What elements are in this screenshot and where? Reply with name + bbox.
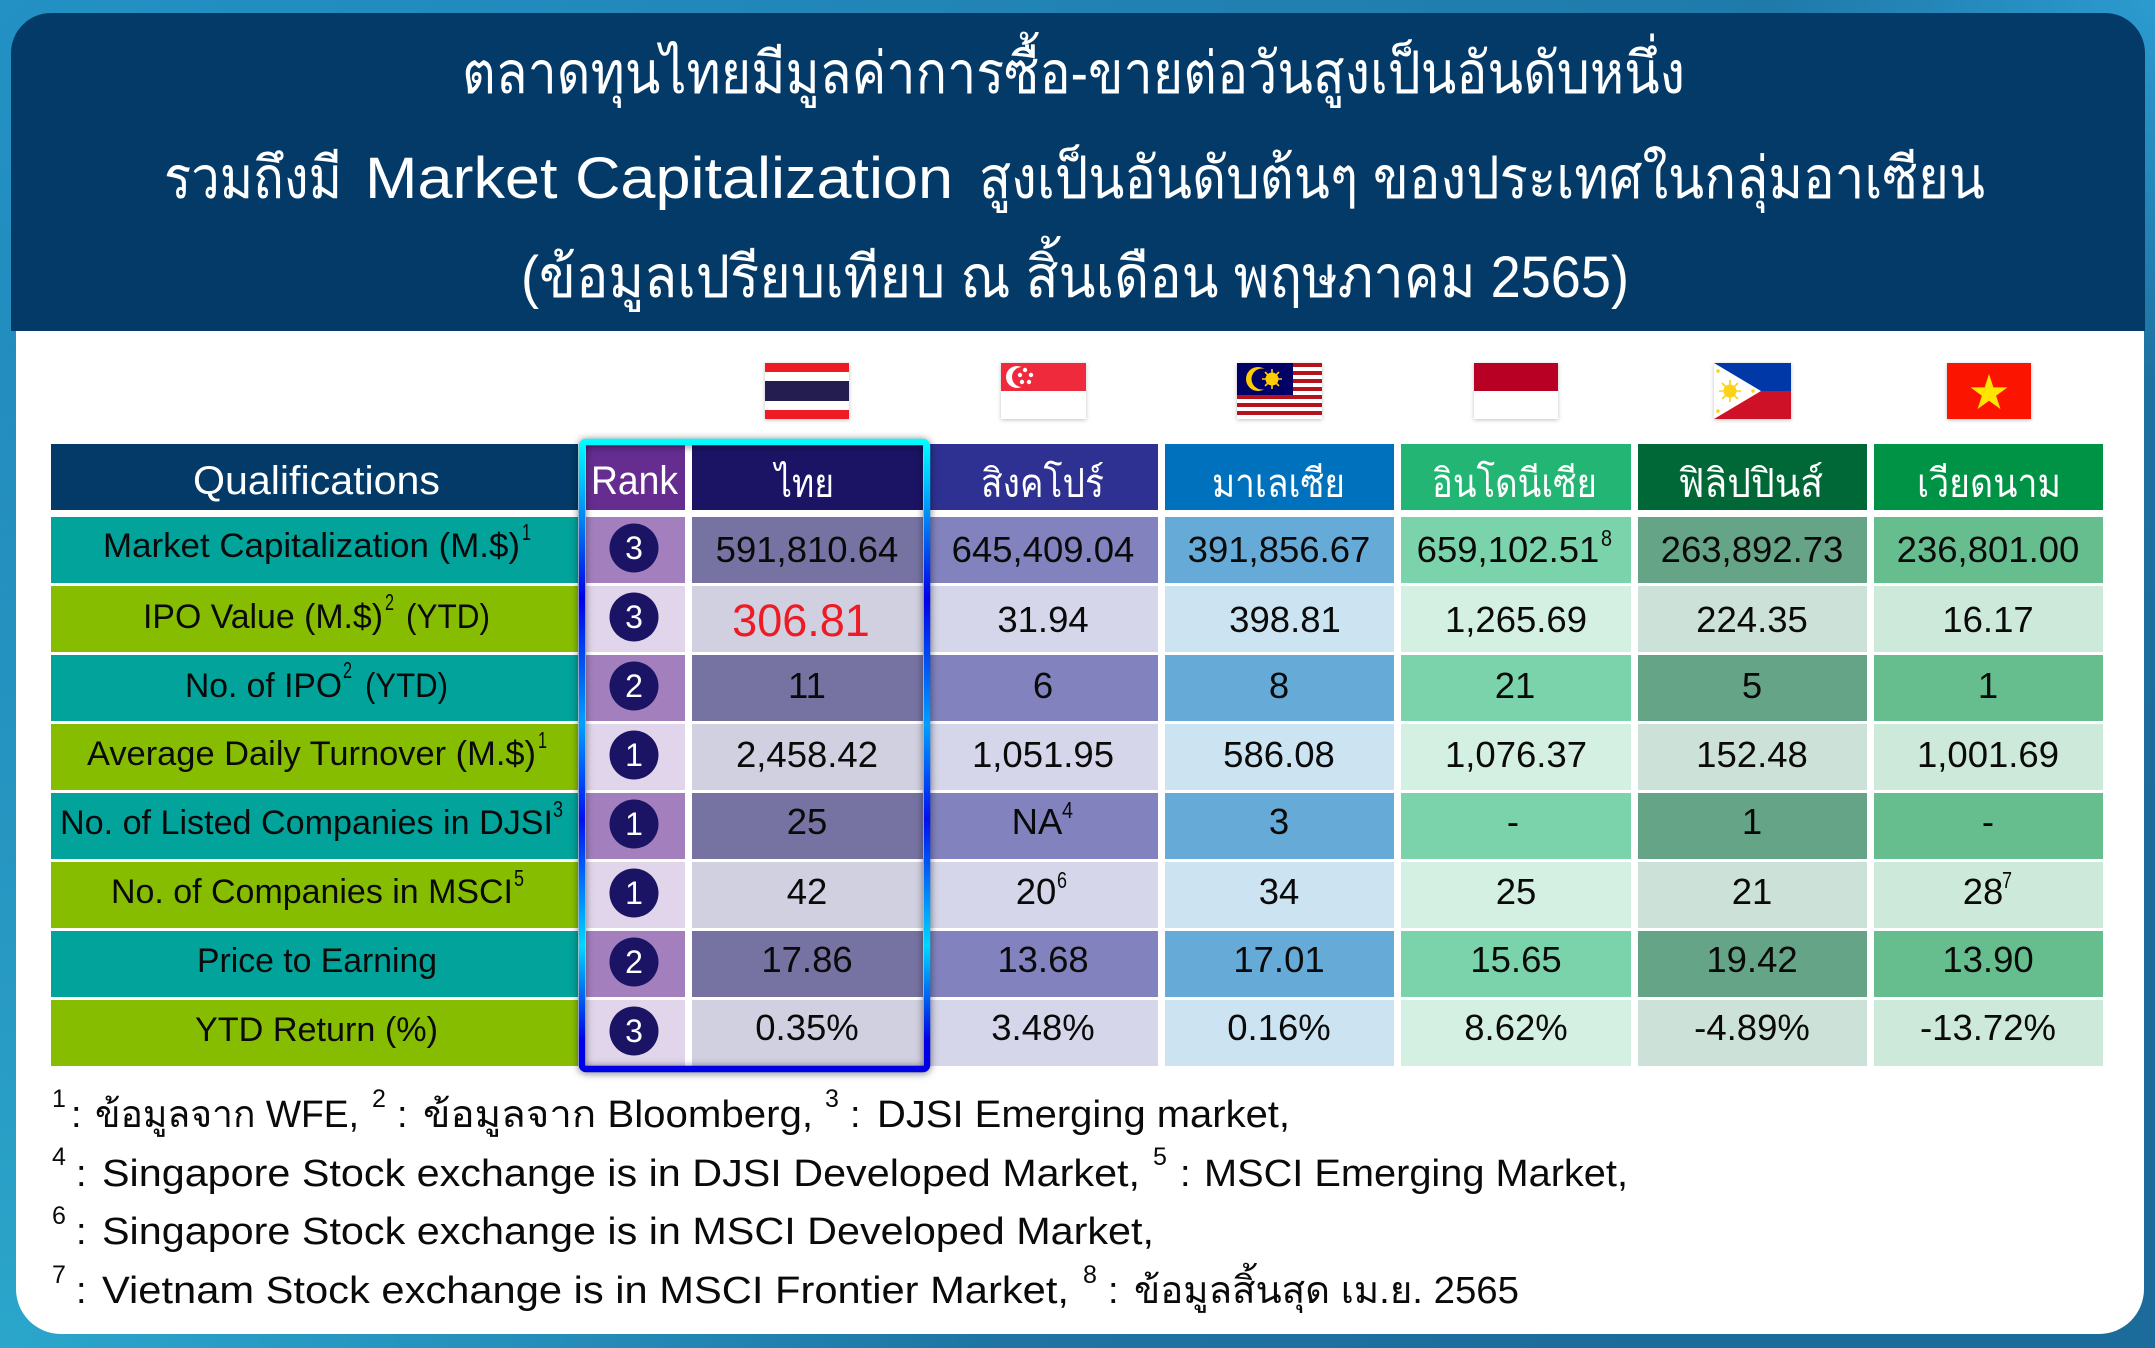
- row: YTD Return: [51, 1000, 2103, 1066]
- row: No. of Listed Companies in DJSI: 25: [787, 801, 827, 842]
- icon: flag of Indonesia: [1474, 363, 1558, 419]
- row: No. of Companies in MSCI: No. of Companies in MSCI: [111, 873, 513, 911]
- row: No. of IPO: No. of IPO: [185, 667, 342, 705]
- row: No. of Companies in MSCI: 5: [514, 865, 524, 891]
- footnote line 4: :: [76, 1270, 87, 1312]
- footnote line 2: [52, 1143, 1628, 1195]
- footnote line 2: 4: [52, 1143, 66, 1171]
- row: Average Daily Turnover: 1,001.69: [1917, 734, 2059, 775]
- title line 2: รวมถึงมี: [164, 146, 342, 211]
- footnote line 1: :: [71, 1094, 82, 1136]
- icon: flag of Vietnam: [1947, 363, 2031, 419]
- row: Price to Earning: 17.86: [761, 939, 853, 980]
- row: Average Daily Turnover: [51, 724, 2103, 790]
- row: Average Daily Turnover: Average Daily Turnover (M.$): [87, 735, 536, 773]
- row: YTD Return: 3.48%: [991, 1007, 1095, 1048]
- row: Market Capitalization: 8: [1601, 525, 1612, 551]
- row: YTD Return: 8.62%: [1464, 1007, 1568, 1048]
- table: [51, 444, 2103, 1066]
- row: No. of IPO: 1: [1978, 665, 1998, 706]
- title line 2: [164, 144, 1985, 214]
- footnote line 4: 7: [52, 1261, 66, 1289]
- footnote line 1: :: [397, 1094, 408, 1136]
- title line 2: สูงเป็นอันดับต้นๆ ของประเทศในกลุ่มอาเซียน: [979, 144, 1985, 214]
- row: No. of Listed Companies in DJSI: 3: [553, 796, 563, 822]
- row: IPO Value: 16.17: [1942, 599, 2034, 640]
- row: No. of IPO: 2: [343, 657, 352, 683]
- row: IPO Value: 3: [625, 599, 643, 635]
- row: Average Daily Turnover: 152.48: [1696, 734, 1808, 775]
- table header row: ไทย: [772, 461, 834, 506]
- footnote line 1: 1: [52, 1085, 66, 1113]
- row: No. of Listed Companies in DJSI: 1: [1742, 801, 1762, 842]
- row: No. of Companies in MSCI: 42: [787, 871, 827, 912]
- row: No. of Companies in MSCI: 6: [1057, 867, 1067, 893]
- row: IPO Value: IPO Value (M.$): [143, 598, 383, 636]
- row: Price to Earning: 17.01: [1233, 939, 1325, 980]
- header band: [11, 13, 2145, 331]
- footnote line 1: [52, 1085, 1290, 1137]
- panel: white content card: [16, 300, 2144, 1334]
- row: YTD Return: YTD Return (%): [195, 1011, 438, 1049]
- footnote line 4: 8: [1083, 1261, 1097, 1289]
- row: Price to Earning: 13.90: [1942, 939, 2034, 980]
- footnote line 4: Vietnam Stock exchange is in MSCI Frontier Market,: [102, 1270, 1069, 1312]
- row: No. of Listed Companies in DJSI: NA: [1012, 801, 1063, 842]
- row: Market Capitalization: 1: [522, 519, 531, 545]
- row: IPO Value: 2: [385, 589, 394, 615]
- footnotes: [52, 1085, 1628, 1313]
- row: IPO Value: 398.81: [1229, 599, 1341, 640]
- row: IPO Value: 224.35: [1696, 599, 1808, 640]
- row: Market Capitalization: [51, 517, 2103, 583]
- footnote line 1: 2: [372, 1085, 386, 1113]
- table header row: Qualifications: [193, 459, 440, 503]
- row: No. of IPO: [51, 655, 2103, 721]
- icon: flag of Thailand: [765, 363, 849, 419]
- row: No. of Companies in MSCI: 1: [625, 875, 643, 911]
- row: No. of Listed Companies in DJSI: 4: [1062, 797, 1073, 823]
- footnote line 4: ข้อมูลสิ้นสุด เม.ย. 2565: [1134, 1262, 1519, 1313]
- footnote line 2: :: [76, 1153, 87, 1195]
- icon: flag of Singapore: [1001, 363, 1086, 419]
- row: Market Capitalization: 645,409.04: [952, 529, 1134, 570]
- row: No. of IPO: 21: [1495, 665, 1535, 706]
- row: No. of IPO: (YTD): [365, 667, 448, 705]
- footnote line 1: ข้อมูลจาก WFE,: [95, 1094, 359, 1137]
- row: Market Capitalization: 659,102.51: [1417, 529, 1599, 570]
- footnote line 2: 5: [1153, 1143, 1167, 1171]
- row: No. of Companies in MSCI: 25: [1496, 871, 1536, 912]
- row: Market Capitalization: 591,810.64: [716, 529, 898, 570]
- footnote line 1: :: [850, 1094, 861, 1136]
- icon: flag of Malaysia: [1237, 363, 1322, 419]
- row: Average Daily Turnover: 2,458.42: [736, 734, 878, 775]
- row: IPO Value: (YTD): [406, 598, 490, 636]
- row: No. of Listed Companies in DJSI: -: [1507, 801, 1519, 842]
- highlight frame around Thailand column: [582, 442, 927, 1069]
- row: Price to Earning: Price to Earning: [197, 942, 437, 980]
- row: No. of Companies in MSCI: 28: [1963, 871, 2003, 912]
- row: No. of Listed Companies in DJSI: 3: [1269, 801, 1289, 842]
- table header row: อินโดนีเซีย: [1432, 461, 1597, 506]
- row: Average Daily Turnover: 1: [625, 737, 643, 773]
- footnote line 3: :: [76, 1211, 87, 1253]
- footnote line 1: ข้อมูลจาก Bloomberg,: [423, 1094, 813, 1137]
- row: No. of Listed Companies in DJSI: 1: [625, 806, 643, 842]
- row: Market Capitalization: 3: [625, 530, 643, 566]
- table header row: มาเลเซีย: [1212, 462, 1345, 506]
- title line 2: Market Capitalization: [365, 146, 953, 211]
- row: Price to Earning: 15.65: [1470, 939, 1562, 980]
- row: No. of IPO: 5: [1742, 665, 1762, 706]
- row: No. of Companies in MSCI: 21: [1732, 871, 1772, 912]
- row: No. of Listed Companies in DJSI: [51, 793, 2103, 859]
- row: Market Capitalization: 391,856.67: [1188, 529, 1370, 570]
- row: YTD Return: 0.16%: [1227, 1007, 1331, 1048]
- row: Average Daily Turnover: 1: [538, 727, 547, 753]
- row: Market Capitalization: 236,801.00: [1897, 529, 2079, 570]
- row: Price to Earning: [51, 931, 2103, 997]
- title line 3: (ข้อมูลเปรียบเทียบ ณ สิ้นเดือน พฤษภาคม 2565): [521, 236, 1629, 312]
- row: No. of Companies in MSCI: [51, 862, 2103, 928]
- row: Price to Earning: 13.68: [997, 939, 1089, 980]
- row: Market Capitalization: 263,892.73: [1661, 529, 1843, 570]
- title line 1: ตลาดทุนไทยมีมูลค่าการซื้อ-ขายต่อวันสูงเป็นอันดับหนึ่ง: [462, 32, 1685, 109]
- footnote line 2: :: [1180, 1153, 1191, 1195]
- table header row: [51, 444, 2103, 510]
- row: Price to Earning: 19.42: [1706, 939, 1798, 980]
- flags row: [765, 363, 2031, 419]
- footnote line 2: Singapore Stock exchange is in DJSI Developed Market,: [102, 1153, 1140, 1195]
- footnote line 4: [52, 1261, 1519, 1313]
- row: No. of IPO: 6: [1033, 665, 1053, 706]
- row: Price to Earning: 2: [625, 944, 643, 980]
- row: No. of Listed Companies in DJSI: No. of Listed Companies in DJSI: [60, 804, 553, 842]
- row: YTD Return: 3: [625, 1013, 643, 1049]
- row: IPO Value: 1,265.69: [1445, 599, 1587, 640]
- row: No. of IPO: 11: [788, 665, 826, 706]
- row: No. of Companies in MSCI: 7: [2002, 867, 2012, 893]
- row: No. of Companies in MSCI: 34: [1259, 871, 1299, 912]
- row: YTD Return: 0.35%: [755, 1007, 859, 1048]
- row: Average Daily Turnover: 586.08: [1223, 734, 1335, 775]
- row: No. of IPO: 2: [625, 668, 643, 704]
- footnote line 2: MSCI Emerging Market,: [1204, 1153, 1628, 1195]
- row: Market Capitalization: Market Capitalization (M.$): [103, 527, 520, 565]
- table header row: Rank: [591, 459, 679, 503]
- row: IPO Value: [51, 586, 2103, 652]
- row: Average Daily Turnover: 1,076.37: [1445, 734, 1587, 775]
- row: Average Daily Turnover: 1,051.95: [972, 734, 1114, 775]
- row: YTD Return: -4.89%: [1694, 1007, 1810, 1048]
- footnote line 3: Singapore Stock exchange is in MSCI Developed Market,: [102, 1211, 1154, 1253]
- row: IPO Value: 31.94: [997, 599, 1089, 640]
- footnote line 4: :: [1108, 1270, 1119, 1312]
- footnote line 1: DJSI Emerging market,: [877, 1094, 1290, 1136]
- row: IPO Value: 306.81: [732, 595, 870, 646]
- footnote line 1: 3: [825, 1085, 839, 1113]
- row: No. of IPO: 8: [1269, 665, 1289, 706]
- table header row: เวียดนาม: [1917, 462, 2061, 506]
- table header row: ฟิลิปปินส์: [1678, 461, 1823, 506]
- row: No. of Listed Companies in DJSI: -: [1982, 801, 1994, 842]
- table header row: สิงคโปร์: [981, 461, 1104, 506]
- footnote line 3: 6: [52, 1202, 66, 1230]
- icon: flag of the Philippines: [1714, 363, 1791, 419]
- row: No. of Companies in MSCI: 20: [1016, 871, 1056, 912]
- row: YTD Return: -13.72%: [1920, 1007, 2056, 1048]
